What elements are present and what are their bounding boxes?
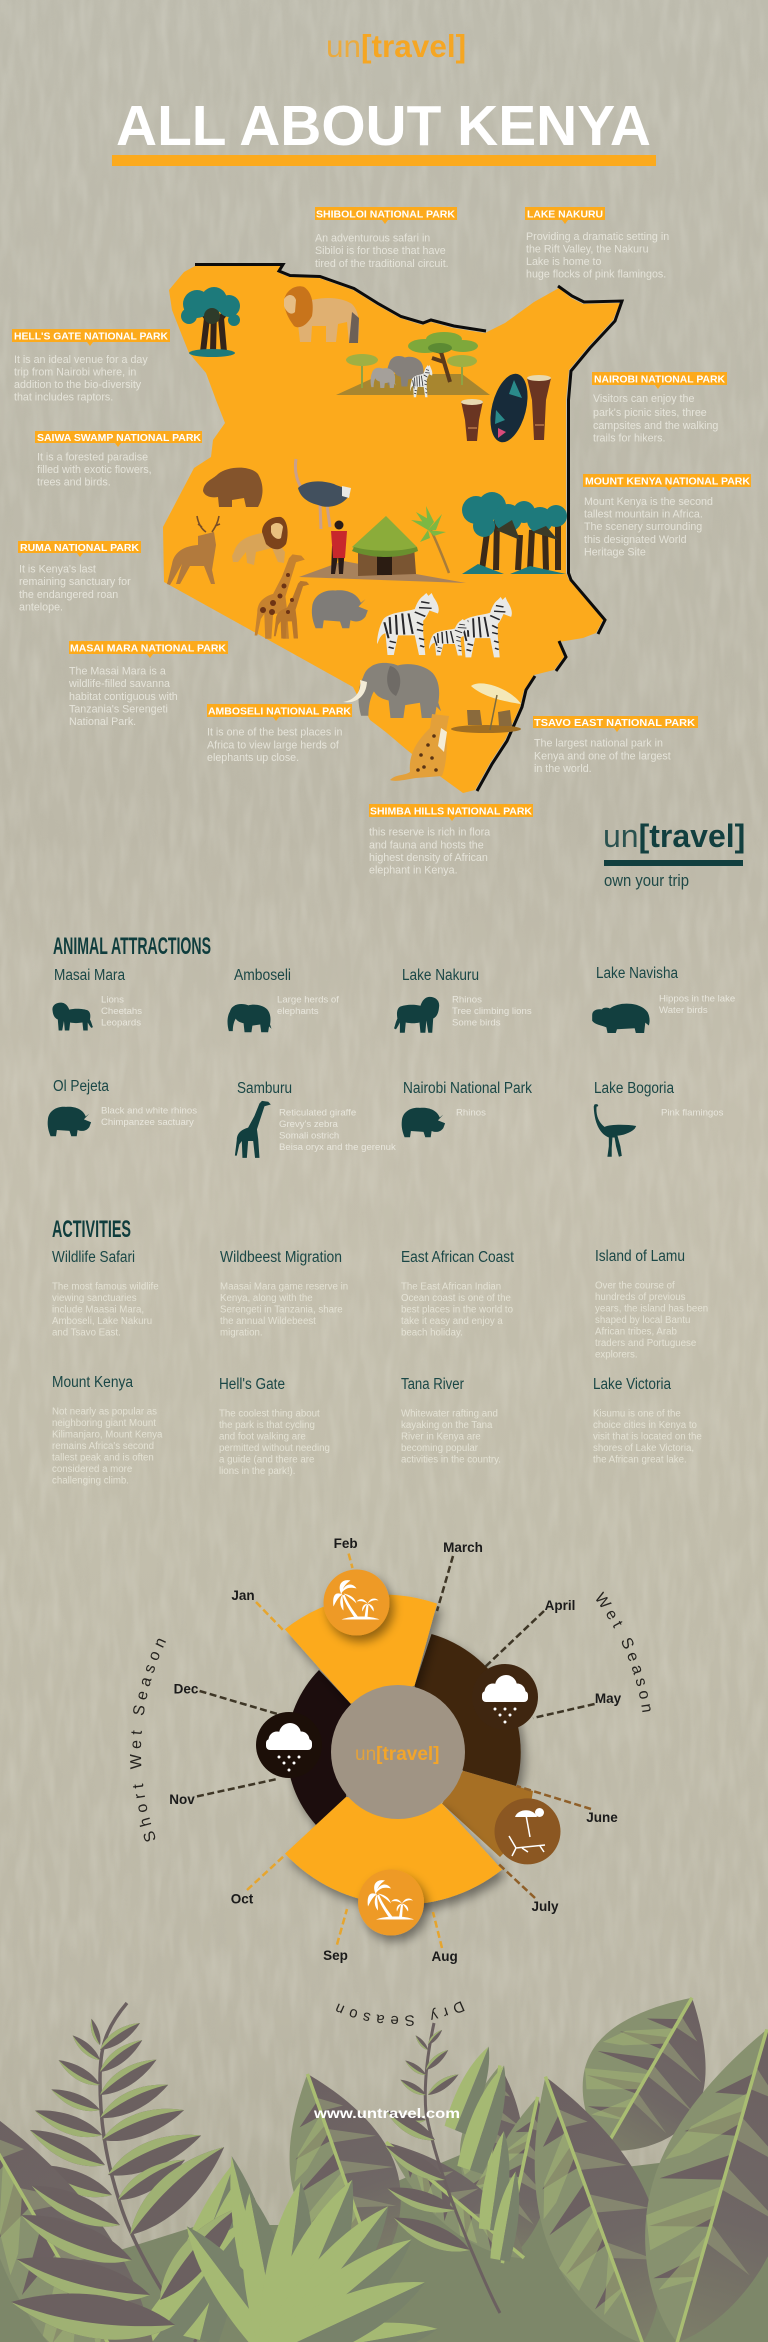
label: Mount Kenya National Park: Mount Kenya is the second [584,496,713,508]
label: Mount Kenya National Park: The scenery surrounding [584,521,702,533]
label: Masai Mara National Park: habitat contiguous with [69,691,178,703]
activity: Hell's Gate: Hell's Gate [219,1376,285,1393]
website url: www.untravel.com [313,2105,460,2121]
activity: Mount Kenya [52,1374,163,1486]
banana leaf left edge [0,2068,203,2342]
activity: Lake Victoria: shores of Lake Victoria, [593,1443,694,1454]
heading: ACTIVITIES [52,1216,131,1243]
label: Amboseli National Park: AMBOSELI NATIONAL PARK [208,706,351,718]
label: Nairobi National Park: trails for hikers. [593,432,665,444]
icon: hut with Maasai and ground [299,516,466,583]
activity: Island of Lamu: African tribes, Arab [595,1326,677,1338]
activity: Wildlife Safari: Amboseli, Lake Nakuru [52,1316,152,1327]
label: Masai Mara National Park: Tanzania's Serengeti [69,704,168,716]
card: Samburu [235,1080,396,1158]
icon: savanna with elephants and acacia [336,332,490,397]
card: Samburu: Somali ostrich [279,1130,339,1142]
activity: Hell's Gate: a guide (and there are [219,1454,314,1466]
month labels: March [443,1540,483,1555]
card: Amboseli: Amboseli [234,967,291,984]
label: Hell's Gate National Park: addition to the bio-diversity [14,379,142,391]
activity: East African Coast: Ocean coast is one of the [401,1293,511,1304]
sector: june july [442,1771,533,1857]
label: Ruma National Park: antelope. [19,602,63,614]
month labels: Feb [334,1536,358,1551]
month labels: May [595,1691,622,1706]
brand logo: un[travel] [326,28,466,64]
activity: Wildbeest Migration: Maasai Mara game reserve in [220,1282,348,1292]
card: Lake Navisha: Lake Navisha [596,965,678,982]
month labels: Aug [431,1949,458,1964]
activity: Wildlife Safari: The most famous wildlife [52,1282,159,1292]
brand lockup: own your trip: un[travel] [603,818,745,854]
activity: Hell's Gate: lions in the park!). [219,1466,295,1477]
activity: Wildlife Safari: and Tsavo East. [52,1328,121,1338]
card: Nairobi National Park: Nairobi National Park [403,1080,532,1097]
icon: forest east [462,492,567,574]
icon: elephant [343,663,441,718]
activity: Lake Victoria: Kisumu is one of the [593,1408,681,1420]
icon: palm badge bottom [358,1870,424,1936]
label: Hell's Gate National Park: It is an ideal venue for a day [14,354,148,366]
card: Masai Mara [52,967,142,1030]
curved label: dry season: Dry Season [336,2001,465,2026]
icon: palm tree [411,506,449,573]
brand lockup: own your trip: own your trip [604,872,689,890]
activity: Mount Kenya: Kilimanjaro, Mount Kenya [52,1430,163,1440]
icon: beach umbrella and chairs [451,683,521,733]
activity: Wildbeest Migration: Serengeti in Tanzania, share [220,1304,343,1316]
card: Amboseli: elephants [277,1006,319,1017]
card: Lake Nakuru: Rhinos [452,994,482,1006]
label: Tsavo East National Park: The largest national park in [534,738,663,750]
label: Ruma National Park: remaining sanctuary for [19,576,131,588]
card: Amboseli [228,967,339,1032]
activity: Mount Kenya: challenging climb. [52,1476,129,1486]
panel: Kenya map [163,264,622,793]
label: Lake Nakuru: Providing a dramatic setting in [526,231,669,243]
label: Shiboloi National Park [315,207,457,270]
fronds centre left [133,2155,272,2342]
activity: Tana River: activities in the country. [401,1454,501,1466]
activity: Lake Victoria: choice cities in Kenya to [593,1420,697,1431]
label: Tsavo East National Park: TSAVO EAST NATIONAL PARK [534,718,696,729]
label: Lake Nakuru [525,207,669,280]
label: Hell's Gate National Park [12,329,170,404]
month labels: Dec [174,1682,199,1696]
month labels: June [586,1810,618,1825]
icon: tree north west [181,287,240,357]
activity: Island of Lamu: traders and Portuguese [595,1338,696,1349]
activity: Island of Lamu [595,1248,708,1360]
label: Shimba Hills National Park: highest density of African [369,852,488,864]
label: Lake Nakuru: the Rift Valley, the Nakuru [526,244,649,256]
label: Saiwa Swamp National Park: SAIWA SWAMP NATIONAL PARK [37,433,201,444]
activity: Mount Kenya: considered a more [52,1464,132,1475]
label: Saiwa Swamp National Park [35,431,202,488]
card: Samburu: Grevy's zebra [279,1119,339,1130]
icon: ostrich [295,459,351,529]
label: Mount Kenya National Park: Heritage Site [584,546,646,558]
card: Masai Mara: Masai Mara [54,967,125,984]
label: Amboseli National Park: elephants up close. [207,752,299,764]
banana leaf far right [727,2021,768,2199]
label: Tsavo East National Park [533,716,698,775]
month labels: Oct [231,1892,254,1906]
label: Shimba Hills National Park: elephant in Kenya. [369,864,458,876]
card: Ol Pejeta: Ol Pejeta [53,1078,109,1095]
card: Samburu: Samburu [237,1080,292,1097]
activity: Hell's Gate: permitted without needing [219,1443,330,1454]
panel: seasons wheel [130,1536,651,2026]
sector: wet season [414,1634,521,1786]
activity: Lake Victoria: the African great lake. [593,1454,687,1466]
card: Lake Nakuru [394,967,532,1033]
activity: East African Coast: take it easy and enjoy a [401,1316,503,1327]
activity: East African Coast: beach holiday. [401,1328,463,1338]
banana leaf top right [552,1968,744,2180]
label: Shimba Hills National Park [369,804,533,876]
label: Mount Kenya National Park: this designated World [584,534,687,546]
card: Samburu: Reticulated giraffe [279,1108,356,1118]
label: Shiboloi National Park: SHIBOLOI NATIONAL PARK [316,210,455,220]
centre circle with logo: un[travel] [355,1744,440,1765]
title underline [112,155,656,166]
activity: Wildlife Safari [52,1249,159,1338]
label: Mount Kenya National Park: MOUNT KENYA NATIONAL PARK [585,476,750,488]
card: Masai Mara: Cheetahs [101,1006,142,1017]
activity: Tana River: Tana River [401,1376,464,1393]
sector: dry season bottom [285,1797,502,1905]
icon: rhino [312,590,368,628]
card: Nairobi National Park [402,1080,532,1137]
card: Ol Pejeta: Chimpanzee sactuary [101,1117,194,1128]
activity: Wildlife Safari: viewing sanctuaries [52,1293,137,1304]
activity: Island of Lamu: Island of Lamu [595,1248,685,1265]
label: Shimba Hills National Park: and fauna and hosts the [369,840,484,852]
activity: Wildlife Safari: Wildlife Safari [52,1249,135,1266]
label: Nairobi National Park: campsites and the walking [593,420,718,432]
activity: Mount Kenya: remains Africa's second [52,1441,154,1452]
month labels: Sep [323,1948,348,1963]
banana leaf right [612,2011,768,2342]
activity: Hell's Gate: and foot walking are [219,1432,306,1442]
month labels: Nov [169,1792,195,1807]
activity: Island of Lamu: hundreds of previous [595,1292,686,1303]
icon: lion north [284,286,359,343]
icon: rain cloud short wet season [256,1712,322,1778]
activity: East African Coast: The East African Indian [401,1282,501,1292]
label: Lake Nakuru: huge flocks of pink flamingos. [526,268,666,280]
activity: Island of Lamu: explorers. [595,1350,638,1360]
card: Lake Bogoria [594,1080,724,1157]
activity: Wildbeest Migration [220,1249,348,1338]
card: Ol Pejeta: Black and white rhinos [101,1106,197,1116]
month leader lines [197,1554,595,1948]
month labels [169,1536,622,1964]
panel: activities [52,1216,708,1486]
banana leaf centre left [258,2056,426,2288]
central palm fan [170,2151,441,2342]
card: Masai Mara: Lions [101,994,124,1006]
centre circle with logo [331,1685,465,1819]
fern lower left leaflets [8,2176,247,2342]
heading: ANIMAL ATTRACTIONS [53,933,211,960]
icon: giraffes [255,554,309,639]
card: Lake Nakuru: Tree climbing lions [452,1006,532,1017]
label: Shiboloi National Park: An adventurous safari in [315,232,430,244]
label: Lake Nakuru: LAKE NAKURU [527,210,603,220]
activity: Tana River: River in Kenya are [401,1432,481,1442]
activity: Mount Kenya: Mount Kenya [52,1374,133,1391]
activity: Lake Victoria: visit that is located on the [593,1432,702,1442]
icon: lion with mane [232,517,288,565]
fern centre [380,2023,527,2313]
label: Shimba Hills National Park: SHIMBA HILLS NATIONAL PARK [370,806,532,818]
icon: deer [167,516,220,585]
icon: zebras [377,593,512,657]
activity: Wildlife Safari: include Maasai Mara, [52,1304,144,1316]
label: Hell's Gate National Park: HELL'S GATE NATIONAL PARK [14,332,168,342]
label: Saiwa Swamp National Park: It is a forested paradise [37,452,148,464]
label: Amboseli National Park: It is one of the best places in [207,726,343,738]
activity: Mount Kenya: neighboring giant Mount [52,1418,156,1429]
label: Amboseli National Park [207,704,352,764]
label: Masai Mara National Park: MASAI MARA NATIONAL PARK [70,644,226,654]
map border shadow [195,264,622,791]
card: Lake Navisha: Water birds [659,1005,708,1016]
card: Amboseli: Large herds of [277,994,339,1006]
label: Tsavo East National Park: Kenya and one of the largest [534,750,671,762]
label: Mount Kenya National Park: tallest mountain in Africa. [584,508,703,520]
activity: Hell's Gate: The coolest thing about [219,1408,320,1420]
label: Ruma National Park: RUMA NATIONAL PARK [20,543,139,554]
label: Masai Mara National Park: National Park. [69,716,136,728]
label: Amboseli National Park: Africa to view large herds of [207,740,339,752]
card: Nairobi National Park: Rhinos [456,1108,486,1118]
icon: bear [203,468,263,507]
monstera lobes centre right [370,2062,567,2277]
activity: Wildbeest Migration: migration. [220,1328,263,1338]
label: Masai Mara National Park [68,641,228,728]
activity: Tana River: kayaking on the Tana [401,1420,493,1431]
activity: Tana River [401,1376,501,1466]
card: Lake Nakuru: Lake Nakuru [402,967,479,984]
label: Nairobi National Park: NAIROBI NATIONAL PARK [594,374,725,386]
curved label: wet season: Wet Season [596,1591,651,1712]
label: Ruma National Park: It is Kenya's last [19,564,96,576]
activity: East African Coast: East African Coast [401,1249,515,1266]
leaf mass [0,2130,768,2342]
icon: cheetah [390,714,449,781]
card: Lake Navisha [592,965,735,1033]
label: Nairobi National Park [592,372,727,444]
icon: sun lounger badge [494,1798,560,1864]
activity: Island of Lamu: Over the course of [595,1280,675,1292]
month labels: July [531,1899,559,1914]
activity: Wildbeest Migration: Wildbeest Migration [220,1249,342,1266]
curved label: short wet season: Short Wet Season [130,1638,166,1842]
label: Nairobi National Park: Visitors can enjoy the [593,393,694,405]
label: Saiwa Swamp National Park: trees and birds. [37,476,111,488]
card: Lake Bogoria: Pink flamingos [661,1108,724,1118]
title: ALL ABOUT KENYA [116,94,651,158]
label: Shiboloi National Park: Sibiloi is for those that have [315,245,446,257]
fern left [25,2003,234,2342]
activity: Hell's Gate [219,1376,330,1477]
card: Ol Pejeta [48,1078,197,1136]
icon: palm badge top [324,1570,390,1636]
activity: East African Coast: best places in the world to [401,1304,513,1316]
label: Lake Nakuru: Lake is home to [526,256,602,268]
activity: Mount Kenya: tallest peak and is often [52,1452,154,1464]
card: Lake Bogoria: Lake Bogoria [594,1080,674,1097]
label: Tsavo East National Park: in the world. [534,763,592,775]
activity: Island of Lamu: years, the island has been [595,1304,708,1314]
card: Lake Navisha: Hippos in the lake [659,994,735,1004]
sector: short wet season [287,1670,351,1825]
activity: Tana River: becoming popular [401,1443,479,1454]
label: Masai Mara National Park: wildlife-filled savanna [68,678,170,690]
label: Ruma National Park [18,541,141,614]
label: Masai Mara National Park: The Masai Mara is a [69,666,166,678]
icon: drums and mask [461,370,551,446]
activity: Lake Victoria [593,1376,702,1466]
label: Shimba Hills National Park: this reserve is rich in flora [369,826,490,838]
month labels: April [545,1598,575,1613]
activity: Wildbeest Migration: Kenya, along with the [220,1293,313,1304]
activity: Lake Victoria: Lake Victoria [593,1376,671,1393]
activity: Island of Lamu: shaped by local Bantu [595,1315,690,1326]
label: Hell's Gate National Park: trip from Nairobi where, in [14,366,136,378]
card: Masai Mara: Leopards [101,1018,141,1028]
label: Mount Kenya National Park [583,474,751,558]
activity: East African Coast [401,1249,515,1338]
panel: animal attractions [48,933,735,1158]
banana leaf right centre [494,2058,694,2342]
brand lockup: own your trip [603,818,745,890]
map country shape [163,266,620,793]
activity: Hell's Gate: the park is that cycling [219,1420,315,1431]
label: Ruma National Park: the endangered roan [19,589,118,601]
label: Nairobi National Park: park's picnic sites, three [593,407,707,419]
label: Saiwa Swamp National Park: filled with exotic flowers, [37,464,152,476]
activity: Wildbeest Migration: the annual Wildebeest [220,1316,316,1327]
card: Lake Nakuru: Some birds [452,1018,501,1028]
card: Samburu: Beisa oryx and the gerenuk [279,1142,396,1153]
activity: Tana River: Whitewater rafting and [401,1408,498,1420]
foliage footer [0,1968,768,2342]
sector: dry season top [285,1595,437,1704]
activity: Mount Kenya: Not nearly as popular as [52,1406,157,1418]
label: Hell's Gate National Park: that includes raptors. [14,392,113,404]
icon: rain cloud wet season [472,1664,538,1730]
label: Shiboloi National Park: tired of the traditional circuit. [315,258,449,270]
month labels: Jan [231,1588,255,1603]
